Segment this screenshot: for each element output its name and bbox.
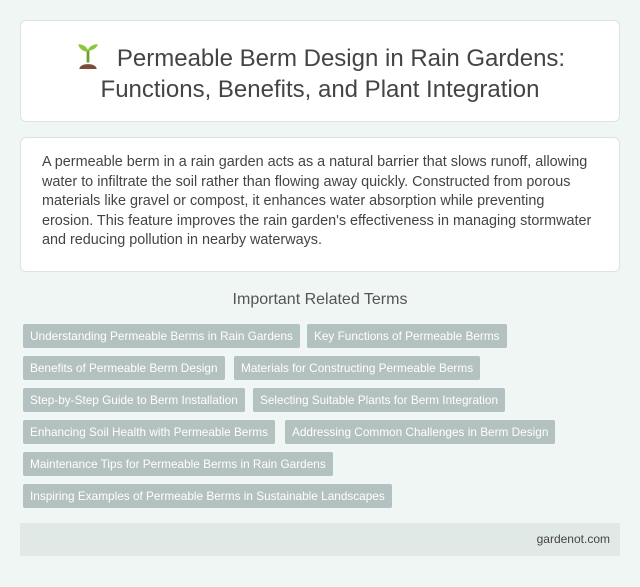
tag: Addressing Common Challenges in Berm Design — [292, 425, 548, 439]
tag: Enhancing Soil Health with Permeable Berms — [30, 425, 268, 439]
tag — [23, 324, 300, 348]
tag — [23, 356, 225, 380]
tag — [285, 420, 555, 444]
section heading: Important Related Terms — [233, 291, 407, 308]
description card — [20, 137, 620, 272]
tag — [234, 356, 480, 380]
title: Functions, Benefits, and Plant Integration — [101, 76, 539, 103]
title card — [20, 20, 620, 122]
tag: Materials for Constructing Permeable Berms — [241, 361, 473, 375]
tag: Selecting Suitable Plants for Berm Integration — [260, 393, 498, 407]
tag: Inspiring Examples of Permeable Berms in Sustainable Landscapes — [30, 489, 385, 503]
tag: Maintenance Tips for Permeable Berms in Rain Gardens — [30, 457, 326, 471]
tag — [23, 484, 392, 508]
tag — [253, 388, 505, 412]
tag: Step-by-Step Guide to Berm Installation — [30, 393, 238, 407]
title: Permeable Berm Design in Rain Gardens: — [117, 45, 565, 72]
tag: Understanding Permeable Berms in Rain Gardens — [30, 329, 293, 343]
tag: Benefits of Permeable Berm Design — [30, 361, 218, 375]
icon: seedling — [78, 44, 98, 69]
footer text: gardenot.com — [537, 532, 610, 546]
tag: Key Functions of Permeable Berms — [314, 329, 500, 343]
tag — [23, 452, 333, 476]
title — [78, 44, 565, 103]
tag — [23, 420, 275, 444]
description text: A permeable berm in a rain garden acts as a natural barrier that slows runoff, allowing water to infiltrate the soil rather than flowing away quickly. Constructed from porous materials like gravel or compost, it enhances water absorption while preventing erosion. This feature improves the rain garden's effectiveness in managing stormwater and reducing pollution in nearby waterways. — [42, 154, 591, 248]
tag — [23, 388, 245, 412]
tag — [307, 324, 507, 348]
footer — [20, 523, 620, 556]
